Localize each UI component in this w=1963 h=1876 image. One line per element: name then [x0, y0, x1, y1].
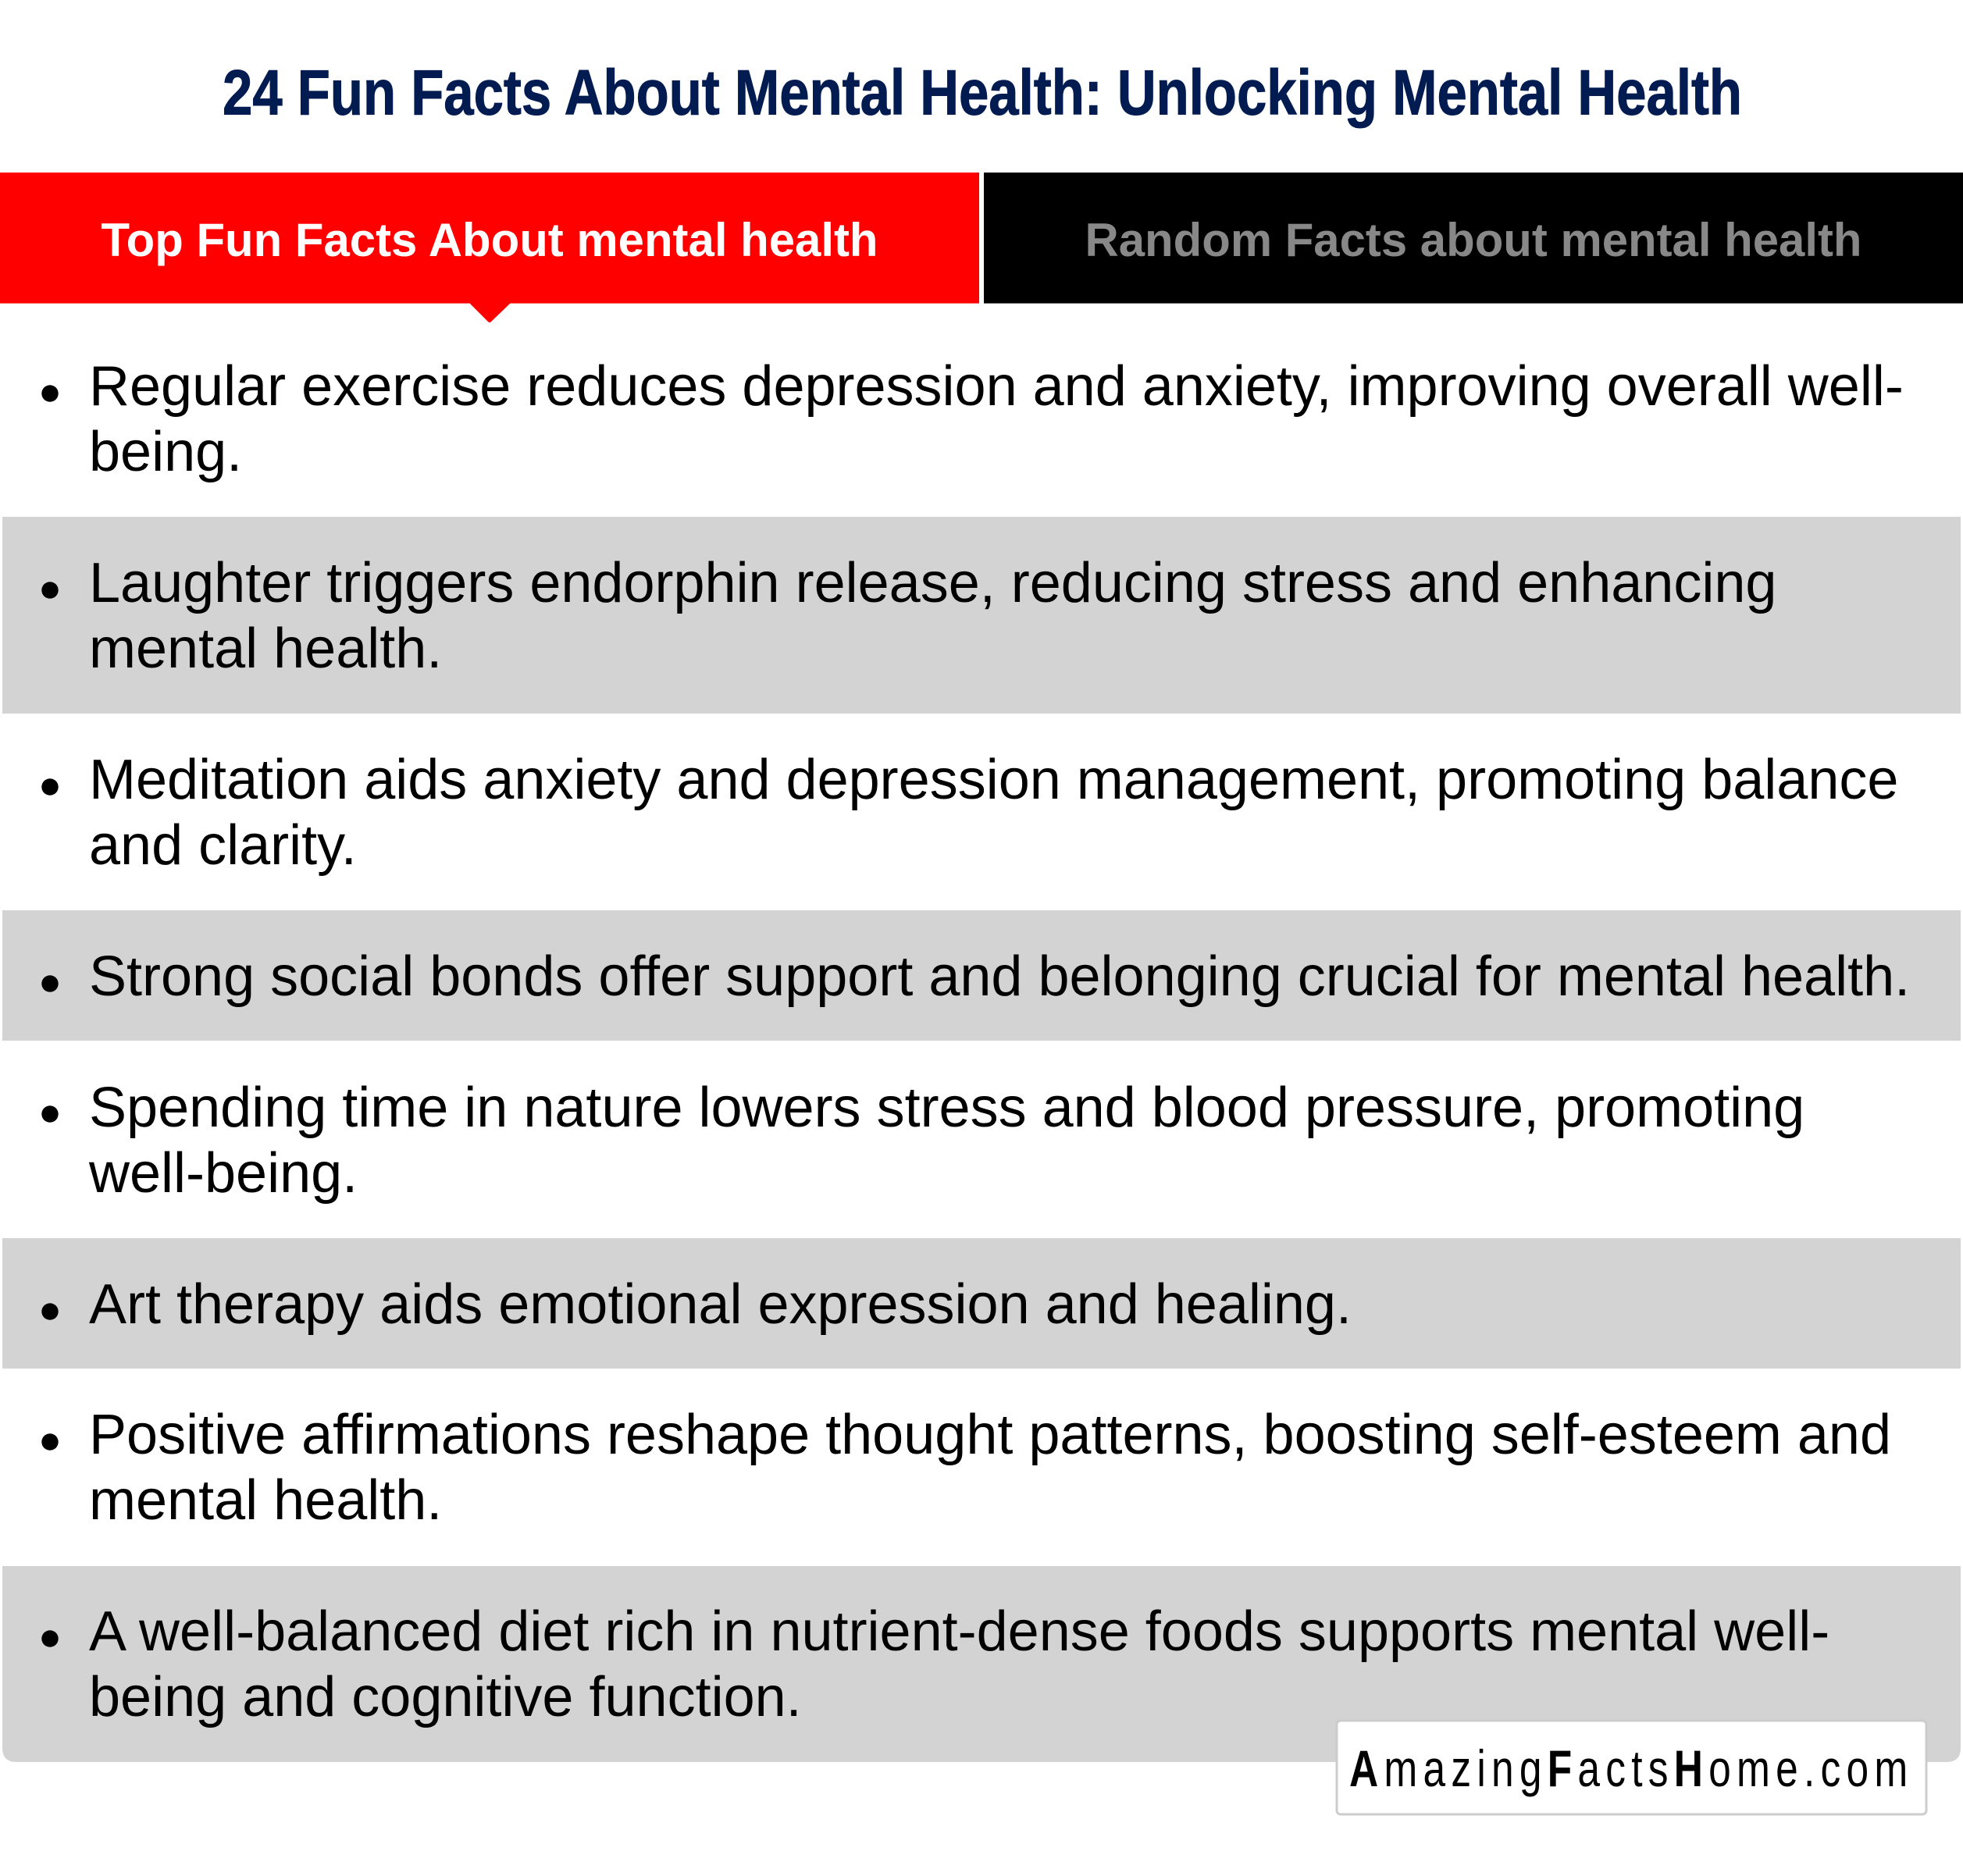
- list row 8: diet: being and cognitive function.: [89, 1666, 802, 1728]
- tab: top fun facts (active): [0, 173, 979, 322]
- list row 3: meditation: and clarity.: [89, 814, 357, 877]
- list row 2: laughter: Laughter triggers endorphin release, reducing stress and enhancing: [89, 552, 1776, 614]
- list row 2: laughter: mental health.: [89, 618, 442, 680]
- list row 6: art therapy: Art therapy aids emotional expression and healing.: [89, 1273, 1352, 1336]
- list row 8: diet: [2, 1566, 1961, 1762]
- logo: AmazingFactsHome.com: [1337, 1721, 1926, 1814]
- list row 2: laughter: [2, 517, 1961, 714]
- list row 5: nature: Spending time in nature lowers stress and blood pressure, promoting: [89, 1077, 1804, 1139]
- list row 1: exercise: being.: [89, 421, 242, 483]
- tab: random facts (inactive): [984, 173, 1963, 304]
- list row 4: social bonds: [2, 910, 1961, 1041]
- tab: random facts (inactive): Random Facts about mental health: [1085, 214, 1861, 266]
- list row 1: exercise: [41, 355, 1904, 483]
- list row 6: art therapy: [2, 1238, 1961, 1369]
- list row 5: nature: well-being.: [88, 1142, 358, 1205]
- list row 7: affirmations: [41, 1404, 1891, 1532]
- tab: top fun facts (active): Top Fun Facts About mental health: [102, 214, 878, 266]
- list row 7: affirmations: mental health.: [89, 1469, 442, 1532]
- list row 3: meditation: Meditation aids anxiety and depression management, promoting balance: [89, 749, 1898, 811]
- list row 1: exercise: Regular exercise reduces depression and anxiety, improving overall well-: [89, 355, 1904, 418]
- logo: AmazingFactsHome.com: AmazingFactsHome.com: [1349, 1739, 1908, 1797]
- list row 7: affirmations: Positive affirmations reshape thought patterns, boosting self-esteem and: [89, 1404, 1891, 1466]
- list row 3: meditation: [41, 749, 1898, 877]
- list row 4: social bonds: Strong social bonds offer support and belonging crucial for mental health.: [89, 945, 1910, 1008]
- list row 8: diet: A well-balanced diet rich in nutrient-dense foods supports mental well-: [89, 1600, 1829, 1663]
- list row 5: nature: [41, 1077, 1804, 1205]
